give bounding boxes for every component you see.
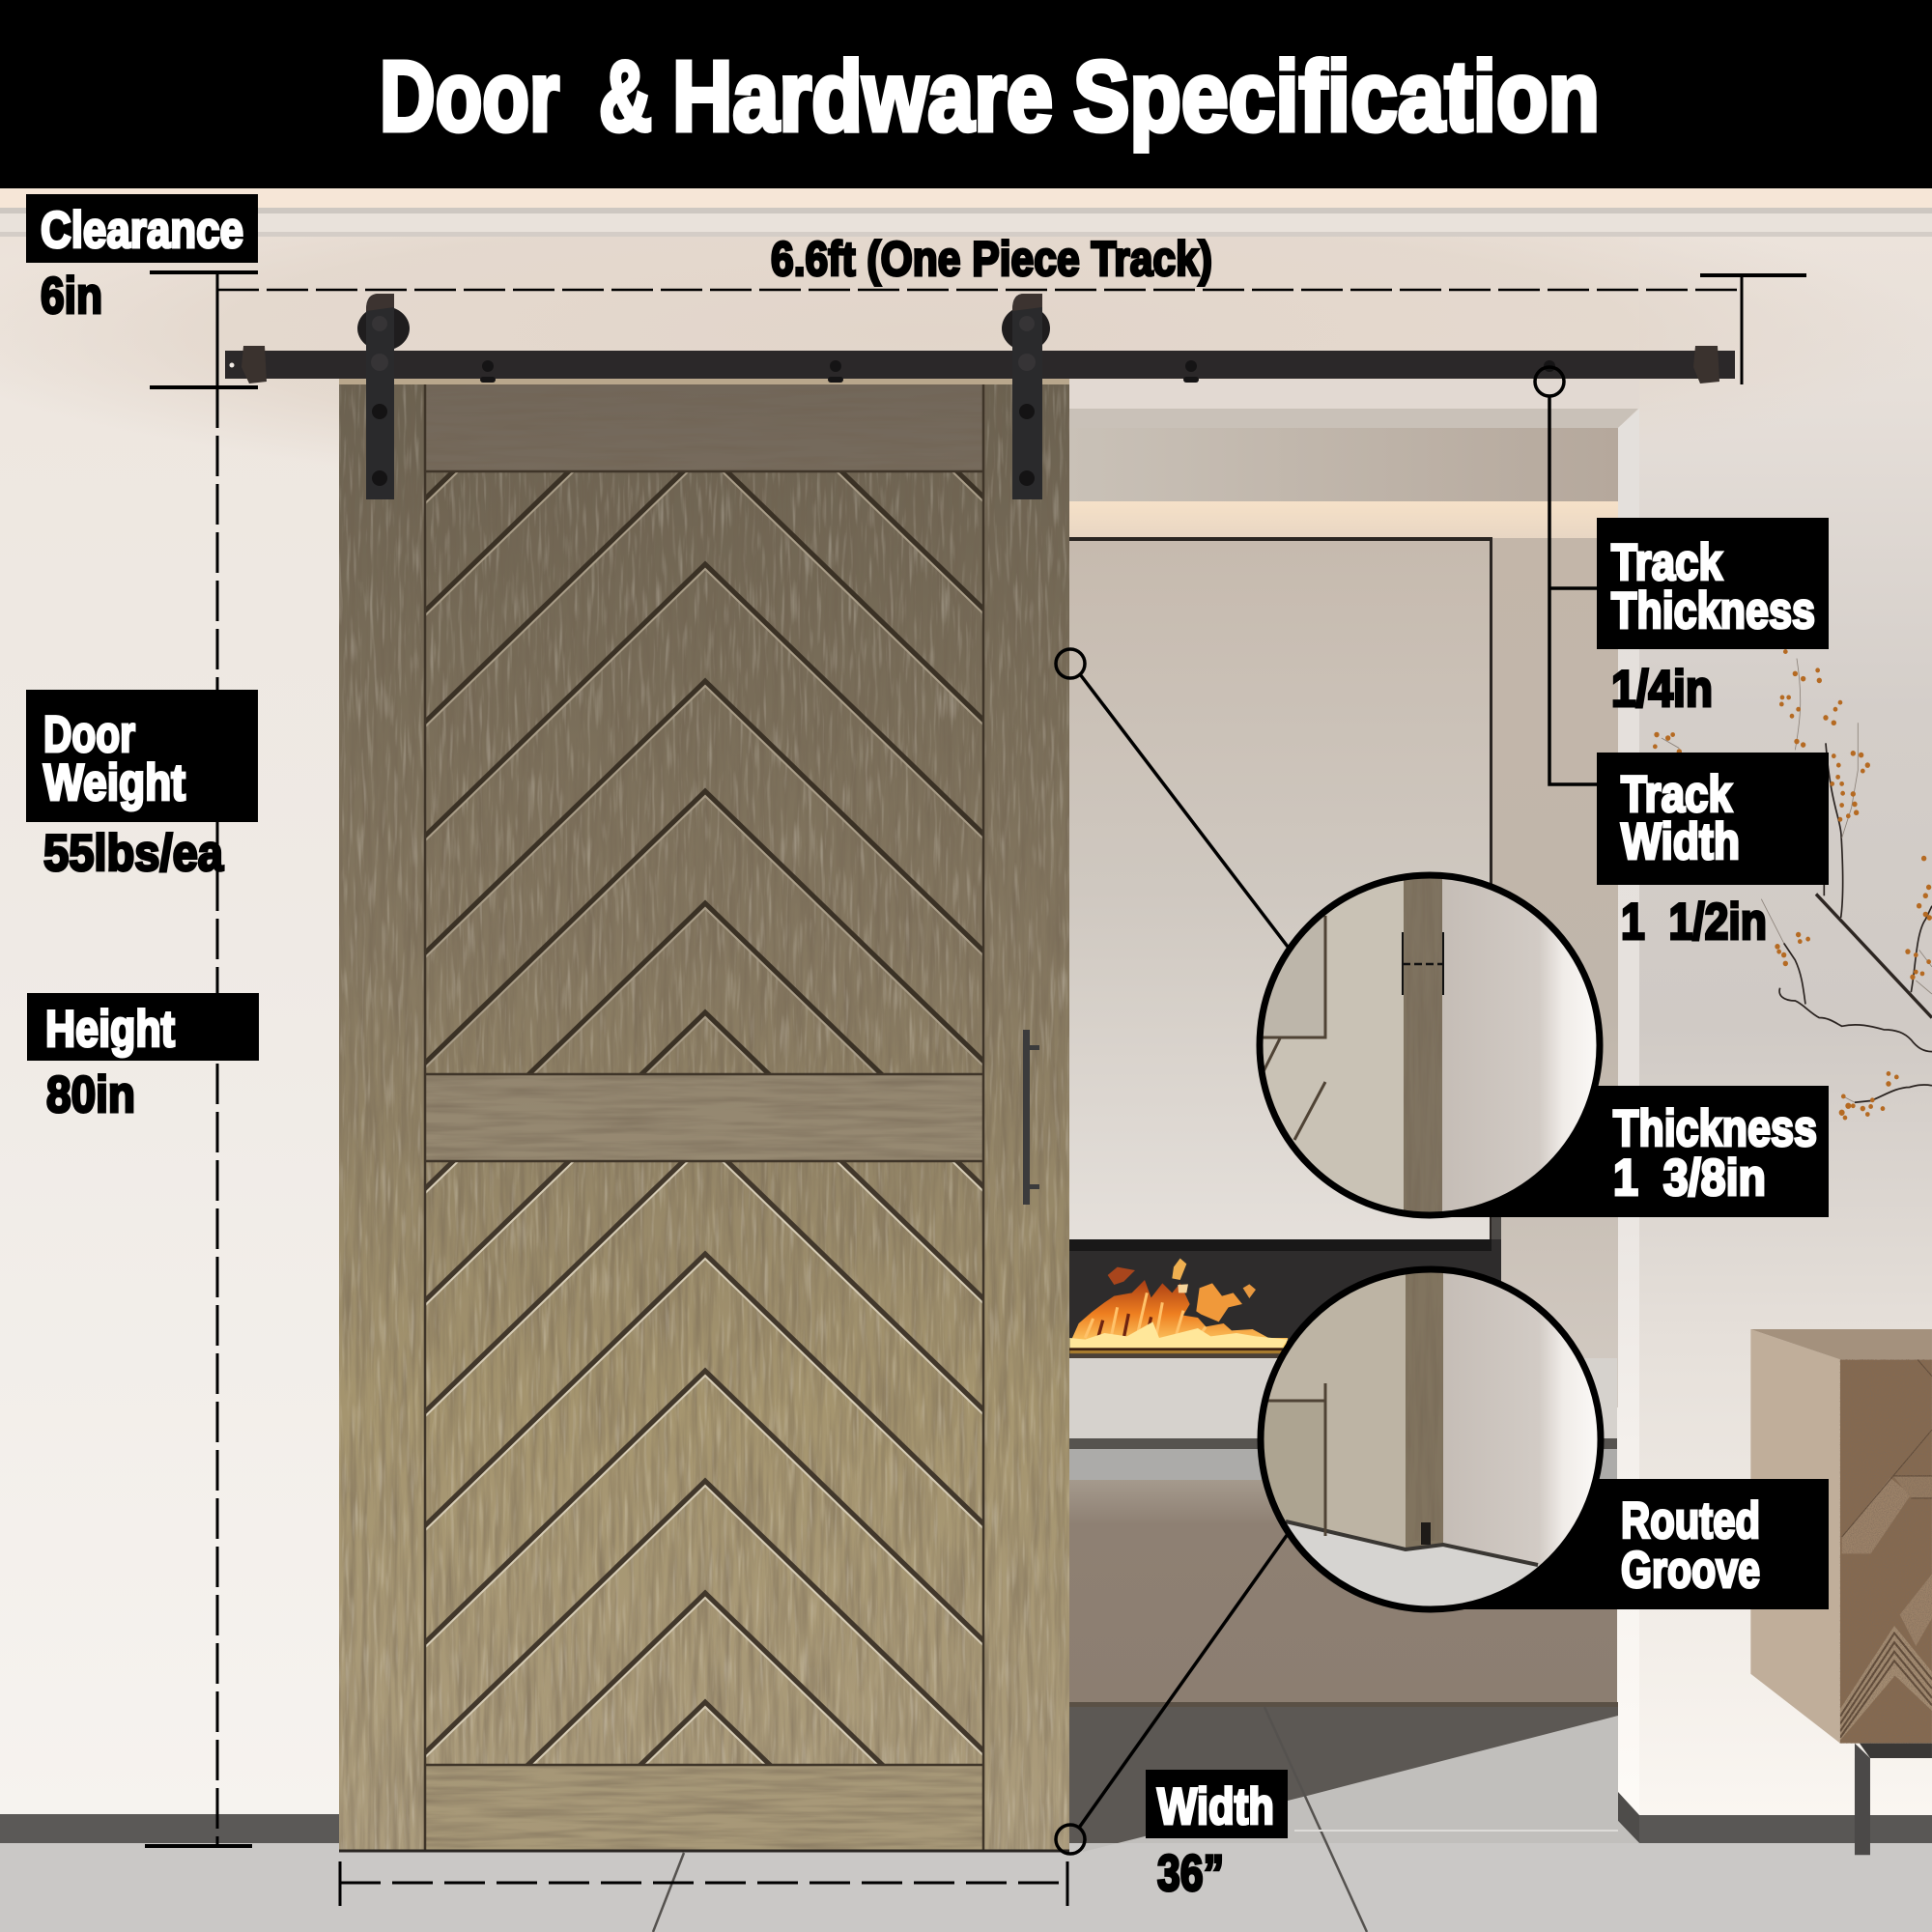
label: door weight — [26, 690, 258, 882]
label: door weight: Weight — [43, 754, 185, 811]
left hanger — [357, 294, 410, 499]
sliding track with hardware — [225, 294, 1735, 499]
magnified door bottom — [1256, 1265, 1605, 1613]
callout: thickness: 1 3/8in — [1613, 1150, 1766, 1207]
label: height — [27, 993, 259, 1123]
callout: thickness — [1256, 869, 1829, 1222]
cabinet — [1750, 1329, 1932, 1855]
right stile grain — [983, 384, 1069, 1851]
warm wash above the track — [0, 169, 1932, 497]
title: & — [599, 41, 652, 152]
decorative branches with berries — [1653, 649, 1932, 1121]
floor — [0, 1843, 1932, 1932]
door handle — [1023, 1030, 1039, 1205]
label: height: 80in — [46, 1066, 135, 1123]
label: track width: Track — [1621, 766, 1732, 823]
track rail — [225, 351, 1735, 379]
magnified door edge — [1256, 869, 1604, 1222]
label: width: Width — [1157, 1778, 1274, 1835]
label: width: 36” — [1157, 1845, 1224, 1902]
cabinet legs — [1855, 1744, 1932, 1855]
lower chevron panel — [426, 1162, 982, 1764]
label: track thickness: Thickness — [1611, 582, 1815, 639]
label: clearance: Clearance — [41, 202, 243, 259]
title bar — [0, 0, 1932, 188]
title — [380, 41, 1600, 152]
flames — [1069, 1259, 1288, 1358]
callout: thickness: Thickness — [1613, 1100, 1817, 1157]
opening header — [1069, 380, 1639, 428]
right wall — [1639, 237, 1932, 1815]
label: door weight: Door — [43, 706, 135, 763]
left stile grain — [339, 384, 425, 1851]
label: track width: Width — [1621, 813, 1740, 870]
top rail — [425, 384, 983, 471]
label: width — [1146, 1770, 1288, 1902]
upper chevron panel — [426, 472, 982, 1073]
title: Hardware — [672, 41, 1053, 152]
title: Door — [380, 41, 559, 152]
label: track length: 6.6ft (One Piece Track) — [771, 232, 1212, 286]
label: track thickness: Track — [1611, 534, 1722, 591]
callout leader lines — [1056, 367, 1597, 1854]
ceiling moulding — [0, 188, 1932, 237]
dimension: door width — [340, 1861, 1067, 1906]
floor joints — [653, 1707, 1367, 1932]
callout: routed groove: Groove — [1621, 1542, 1760, 1599]
middle rail — [425, 1074, 983, 1161]
barn door — [339, 384, 1069, 1853]
label: door weight: 55lbs/ea — [43, 825, 223, 882]
label: height: Height — [45, 1001, 175, 1058]
label: track width: 1 1/2in — [1621, 894, 1767, 951]
right hanger — [1002, 294, 1050, 499]
left end stop — [242, 346, 267, 384]
callout: routed groove — [1256, 1265, 1829, 1613]
right end stop — [1693, 346, 1719, 384]
wall baseboard — [0, 1814, 339, 1843]
label: track thickness — [1597, 518, 1829, 718]
bottom rail — [425, 1765, 983, 1851]
title: Specification — [1073, 41, 1600, 152]
label: clearance — [26, 194, 258, 325]
dimension: height and clearance — [145, 272, 258, 1846]
dimension: track length — [217, 275, 1806, 384]
label: track thickness: 1/4in — [1611, 661, 1713, 718]
label: clearance: 6in — [41, 268, 102, 325]
label: track width — [1597, 753, 1829, 951]
callout: routed groove: Routed — [1621, 1492, 1760, 1549]
